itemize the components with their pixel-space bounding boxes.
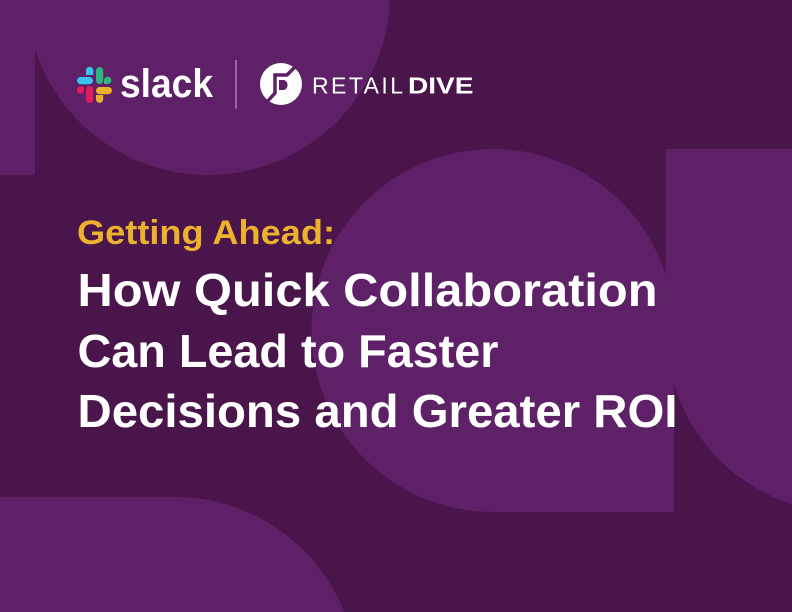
- title: Decisions and Greater ROI: [78, 385, 678, 437]
- centre background shape: [312, 149, 674, 512]
- icon: retail dive mark: [260, 63, 302, 105]
- logo: retail dive: [260, 63, 474, 105]
- logo: slack: [77, 62, 213, 106]
- bottom-left background shape: [0, 497, 344, 612]
- wordmark: slack: slack: [120, 62, 213, 106]
- icon: slack hash mark: [77, 67, 112, 103]
- top-left background shape: [0, 0, 390, 175]
- right background shape: [666, 149, 792, 504]
- wordmark: dive: DIVE: [408, 72, 474, 98]
- title: Can Lead to Faster: [78, 325, 498, 377]
- wordmark: retail: RETAIL: [312, 72, 403, 98]
- title: How Quick Collaboration: [78, 264, 658, 316]
- title: [78, 264, 678, 437]
- logo divider: [236, 60, 237, 108]
- subtitle: Getting Ahead:: [77, 214, 335, 252]
